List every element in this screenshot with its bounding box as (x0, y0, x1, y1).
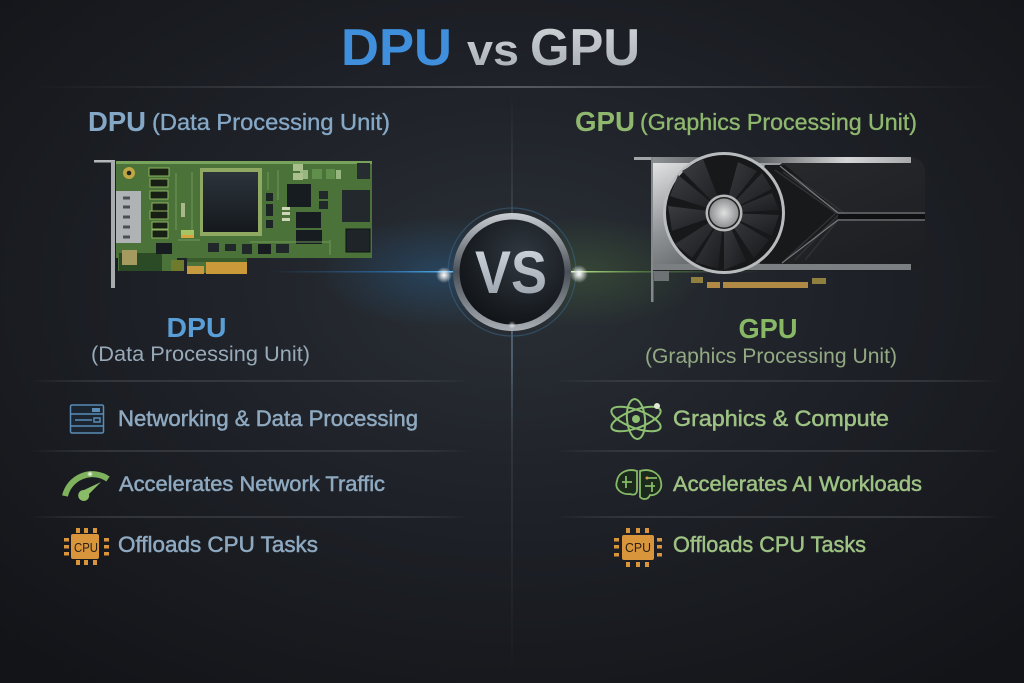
GPU heading: GPU (575, 106, 635, 137)
top divider (25, 86, 1000, 88)
title: vs (467, 26, 519, 75)
icon: atom (608, 398, 664, 440)
panel: GPU (555, 106, 1000, 567)
centre glow (270, 95, 760, 680)
icon: gauge (65, 471, 108, 501)
row: AI workloads (616, 470, 922, 499)
row: offloads CPU: Offloads CPU Tasks (673, 532, 866, 557)
title (341, 19, 640, 77)
panel: DPU (30, 106, 470, 565)
row: offloads CPU: Offloads CPU Tasks (118, 532, 318, 557)
row: offloads CPU (64, 528, 318, 565)
icon: CPU chip: CPU (74, 540, 98, 555)
row: graphics (608, 398, 889, 440)
DPU heading: (Data Processing Unit) (152, 109, 390, 135)
VS badge: VS (475, 239, 547, 306)
DPU name (91, 312, 310, 366)
DPU heading: DPU (88, 106, 146, 137)
gold fingers (691, 277, 826, 288)
icon: CPU chip: CPU (625, 540, 651, 555)
title: GPU (530, 19, 640, 77)
GPU heading: (Graphics Processing Unit) (640, 109, 917, 135)
row: networking: Networking & Data Processing (118, 406, 418, 431)
GPU name (645, 313, 897, 368)
icon: brain (616, 470, 661, 499)
VS badge (436, 208, 588, 336)
DPU name: (Data Processing Unit) (91, 343, 310, 366)
icon: CPU chip (64, 528, 109, 565)
GPU heading (575, 106, 917, 137)
DPU card illustration (94, 160, 372, 288)
DPU heading (88, 106, 390, 137)
GPU card illustration (634, 152, 925, 302)
title: DPU (341, 19, 452, 77)
row: network traffic (65, 471, 385, 501)
row: graphics: Graphics & Compute (673, 406, 889, 431)
DPU name: DPU (166, 312, 226, 343)
icon: server (70, 405, 104, 433)
GPU name: (Graphics Processing Unit) (645, 345, 897, 368)
fan (663, 152, 785, 274)
row: network traffic: Accelerates Network Traffic (119, 473, 385, 496)
GPU name: GPU (738, 313, 798, 344)
icon: CPU chip (614, 528, 662, 567)
row: AI workloads: Accelerates AI Workloads (673, 473, 922, 496)
row: offloads CPU (614, 528, 866, 567)
